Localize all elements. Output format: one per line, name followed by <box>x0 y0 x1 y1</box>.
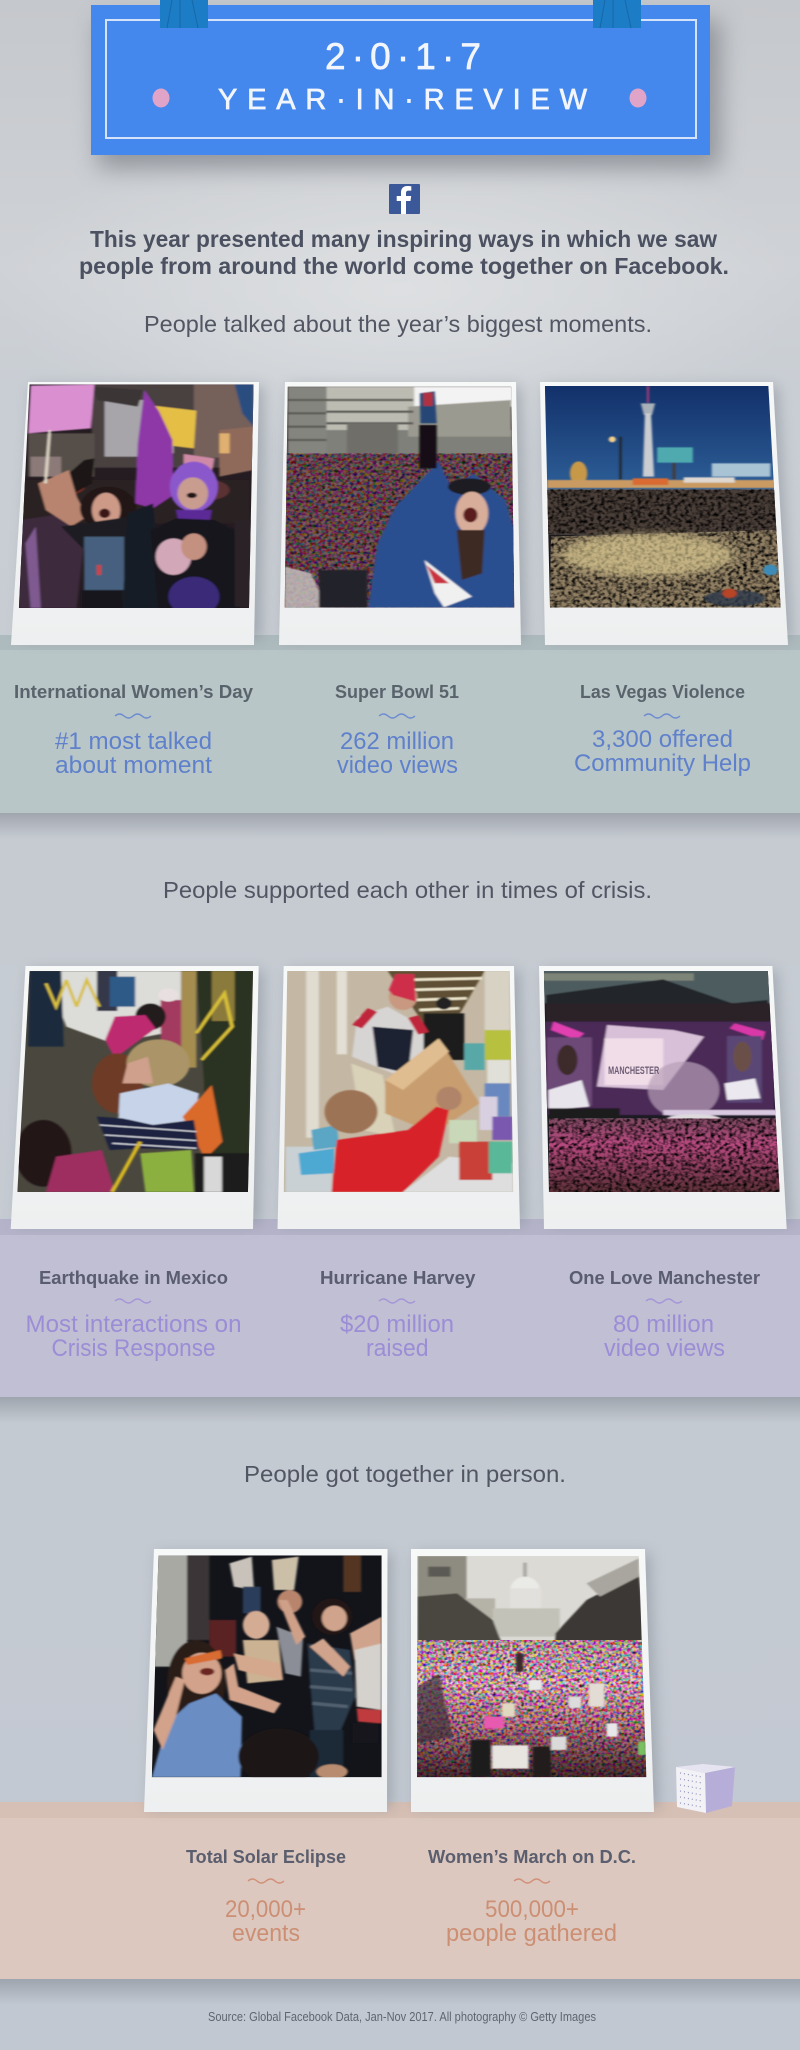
stat group: moments <box>14 681 751 779</box>
stat: Women's March on D.C.: Women’s March on D.C. <box>428 1846 636 1867</box>
intro text <box>79 226 729 279</box>
intro text: This year presented many inspiring ways in which we saw <box>90 226 718 252</box>
shelf front <box>0 1235 800 1397</box>
stat: International Women's Day: International Women’s Day <box>14 681 254 702</box>
polaroid: Earthquake in Mexico <box>11 966 264 1229</box>
photo: earthquake embrace <box>15 970 255 1193</box>
left clip <box>160 0 208 28</box>
stat: Earthquake in Mexico <box>26 1267 242 1362</box>
stat: International Women's Day: #1 most talked <box>55 728 212 755</box>
photo: las vegas vigil <box>541 385 786 610</box>
stat: Hurricane Harvey: raised <box>366 1335 429 1362</box>
stat: Super Bowl 51 <box>335 681 459 779</box>
stat: Total Solar Eclipse: events <box>232 1920 300 1947</box>
shelf shadow <box>0 813 800 839</box>
stat: Total Solar Eclipse: Total Solar Eclipse <box>186 1846 346 1867</box>
stat: One Love Manchester: video views <box>604 1335 725 1362</box>
stat: Total Solar Eclipse: 20,000+ <box>225 1896 306 1923</box>
stat: Las Vegas Violence: Community Help <box>574 750 751 777</box>
polaroid: Super Bowl 51 <box>279 382 526 645</box>
heading: biggest moments: People talked about the year’s biggest moments. <box>144 311 652 337</box>
photo: eclipse viewers <box>149 1553 386 1785</box>
shelf shadow <box>0 1979 800 2005</box>
intro text: people from around the world come together on Facebook. <box>79 253 729 279</box>
right clip <box>593 0 641 28</box>
stat: Las Vegas Violence: 3,300 offered <box>592 726 733 753</box>
stat: Total Solar Eclipse <box>186 1846 346 1947</box>
stat: Super Bowl 51: 262 million <box>340 728 454 755</box>
photo: women's day march <box>15 383 255 617</box>
shelf front <box>0 650 800 813</box>
sign shadow <box>98 20 720 168</box>
stat: Hurricane Harvey: $20 million <box>340 1311 454 1338</box>
photo: women's march crowd <box>412 1553 649 1780</box>
right pin <box>630 88 646 108</box>
stat: One Love Manchester <box>569 1267 760 1362</box>
shelf front <box>0 1818 800 1979</box>
stat: Earthquake in Mexico: Crisis Response <box>52 1335 216 1362</box>
icon: cube <box>676 1764 735 1813</box>
stat: Super Bowl 51: video views <box>337 752 458 779</box>
shelf top <box>0 635 800 650</box>
stat: Hurricane Harvey <box>320 1267 476 1362</box>
stat: One Love Manchester: 80 million <box>613 1311 714 1338</box>
polaroid: One Love Manchester <box>539 966 791 1229</box>
heading: in person: People got together in person. <box>244 1461 566 1487</box>
polaroid: International Women's Day <box>11 382 264 645</box>
stat group: in person <box>186 1846 636 1947</box>
shelf shadow <box>0 1397 800 1423</box>
stat group: crisis <box>26 1267 760 1362</box>
sign title year: 2·0·1·7 <box>325 36 481 77</box>
polaroid: Total Solar Eclipse <box>144 1549 392 1812</box>
stat: International Women's Day <box>14 681 254 779</box>
photo: super bowl crowd <box>283 385 515 610</box>
icon: facebook logo <box>389 184 420 214</box>
stat: Las Vegas Violence <box>574 681 751 777</box>
stat: One Love Manchester: One Love Manchester <box>569 1267 760 1288</box>
panel: crisis shelf <box>0 1219 800 1423</box>
sign frame <box>106 20 696 138</box>
panel: moments shelf <box>0 635 800 839</box>
stat: Women's March on D.C.: people gathered <box>446 1920 617 1947</box>
photo: harvey relief <box>281 970 515 1193</box>
shelf top <box>0 1219 800 1235</box>
stat: Las Vegas Violence: Las Vegas Violence <box>580 681 745 702</box>
stat: Earthquake in Mexico: Most interactions on <box>26 1311 242 1338</box>
sign title review: YEAR·IN·REVIEW <box>218 84 588 116</box>
stat: Women's March on D.C. <box>428 1846 636 1947</box>
left pin <box>152 88 170 108</box>
heading: times of crisis: People supported each other in times of crisis. <box>163 877 652 903</box>
photo: manchester concert: MANCHESTER <box>608 1065 659 1077</box>
stat: Women's March on D.C.: 500,000+ <box>485 1896 579 1923</box>
panel: in-person shelf <box>0 1802 800 2005</box>
photo: manchester concert <box>541 970 786 1193</box>
stat: International Women's Day: about moment <box>55 752 212 779</box>
stat: Earthquake in Mexico: Earthquake in Mexico <box>39 1267 228 1288</box>
polaroid: Women's March on D.C. <box>411 1549 659 1812</box>
stat: Super Bowl 51: Super Bowl 51 <box>335 681 459 702</box>
polaroid: Hurricane Harvey <box>278 966 525 1229</box>
sign board <box>91 5 710 155</box>
shelf top <box>0 1802 800 1818</box>
header sign <box>91 0 720 168</box>
polaroid: Las Vegas Violence <box>540 382 792 645</box>
stat: Hurricane Harvey: Hurricane Harvey <box>320 1267 476 1288</box>
source note: Source: Global Facebook Data, Jan-Nov 2017. All photography © Getty Images <box>208 2010 596 2024</box>
